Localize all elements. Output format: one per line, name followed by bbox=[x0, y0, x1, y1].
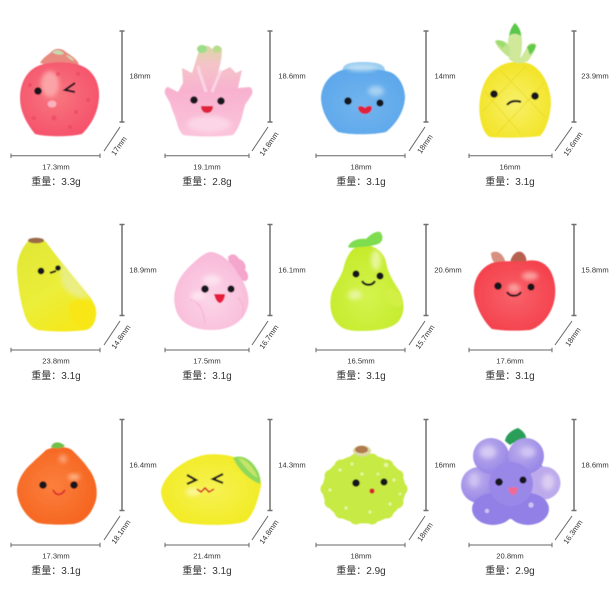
width label: 17.3mm bbox=[42, 162, 70, 172]
height label: 16.4mm bbox=[129, 460, 157, 470]
dimension lines bbox=[469, 420, 576, 547]
depth label: 18mm bbox=[563, 326, 583, 348]
height label: 14.3mm bbox=[278, 460, 306, 470]
panel: dragon fruit bbox=[165, 31, 306, 188]
panel: peach bbox=[165, 224, 306, 382]
weight label: 重量：3.1g bbox=[182, 369, 232, 382]
weight label: 重量：2.9g bbox=[336, 564, 386, 577]
weight label: 重量：3.1g bbox=[336, 175, 386, 188]
height label: 15.8mm bbox=[581, 266, 609, 274]
weight label: 重量：2.8g bbox=[182, 175, 232, 188]
height label: 14mm bbox=[434, 72, 456, 80]
dimension lines bbox=[165, 224, 272, 352]
depth label: 14.8mm bbox=[257, 130, 281, 158]
width label: 20.8mm bbox=[496, 552, 524, 560]
width label: 18mm bbox=[350, 162, 372, 172]
panel: apple bbox=[469, 224, 609, 382]
icon: grape bbox=[461, 428, 560, 525]
icon: apple bbox=[474, 252, 555, 331]
icon: orange bbox=[17, 442, 97, 525]
width label: 23.8mm bbox=[42, 356, 70, 366]
width label: 16mm bbox=[499, 162, 521, 172]
depth label: 14.8mm bbox=[257, 518, 281, 546]
dimension lines bbox=[11, 31, 124, 158]
icon: banana bbox=[17, 238, 96, 332]
dimension lines bbox=[316, 420, 428, 547]
panel: lemon bbox=[161, 420, 306, 577]
icon: durian bbox=[320, 446, 408, 524]
panel: grape bbox=[461, 420, 609, 577]
depth label: 16.7mm bbox=[257, 323, 281, 351]
depth label: 15.6mm bbox=[561, 130, 585, 158]
width label: 19.1mm bbox=[193, 162, 221, 172]
icon: blueberry bbox=[321, 62, 405, 134]
depth label: 16.3mm bbox=[561, 518, 585, 546]
icon: pineapple bbox=[479, 23, 551, 138]
height label: 18.9mm bbox=[129, 266, 157, 274]
icon: strawberry bbox=[20, 49, 99, 136]
panel: blueberry bbox=[316, 31, 456, 188]
dimension lines bbox=[316, 31, 428, 158]
weight label: 重量：3.3g bbox=[31, 175, 81, 188]
width label: 17.5mm bbox=[193, 356, 221, 366]
weight label: 重量：3.1g bbox=[31, 369, 81, 382]
icon: peach bbox=[174, 252, 249, 330]
panel: banana bbox=[11, 224, 157, 382]
weight label: 重量：3.1g bbox=[485, 175, 535, 188]
height label: 18.6mm bbox=[581, 460, 609, 470]
width label: 17.3mm bbox=[42, 552, 70, 560]
width label: 17.6mm bbox=[496, 356, 524, 366]
height label: 16mm bbox=[434, 460, 456, 470]
width label: 21.4mm bbox=[193, 552, 221, 560]
height label: 16.1mm bbox=[278, 266, 306, 274]
panel: strawberry bbox=[11, 31, 151, 188]
weight label: 重量：3.1g bbox=[182, 564, 232, 577]
panel: durian bbox=[316, 420, 456, 577]
dimension lines bbox=[165, 420, 272, 547]
height label: 18mm bbox=[129, 72, 151, 80]
icon: dragon fruit bbox=[165, 45, 252, 136]
depth label: 17mm bbox=[109, 135, 129, 157]
icon: lemon bbox=[161, 454, 261, 525]
panel: pear bbox=[316, 224, 462, 382]
depth label: 18.1mm bbox=[109, 518, 133, 546]
panel: pineapple bbox=[469, 23, 609, 188]
dimension lines bbox=[316, 224, 428, 352]
weight label: 重量：2.9g bbox=[485, 564, 535, 577]
dimension lines bbox=[11, 420, 124, 547]
width label: 18mm bbox=[350, 552, 372, 560]
depth label: 18mm bbox=[415, 133, 435, 155]
height label: 23.9mm bbox=[581, 72, 609, 80]
icon: pear bbox=[330, 232, 404, 331]
weight label: 重量：3.1g bbox=[31, 564, 81, 577]
height label: 18.6mm bbox=[278, 72, 306, 80]
weight label: 重量：3.1g bbox=[485, 369, 535, 382]
dimension lines bbox=[11, 224, 124, 352]
height label: 20.6mm bbox=[434, 266, 462, 274]
panel: orange bbox=[11, 420, 157, 577]
weight label: 重量：3.1g bbox=[336, 369, 386, 382]
dimension lines bbox=[165, 31, 272, 158]
dimension lines bbox=[469, 31, 576, 158]
depth label: 15.7mm bbox=[413, 323, 437, 351]
depth label: 14.8mm bbox=[109, 323, 133, 351]
width label: 16.5mm bbox=[347, 356, 375, 366]
dimension lines bbox=[469, 224, 576, 352]
depth label: 18mm bbox=[415, 521, 435, 543]
